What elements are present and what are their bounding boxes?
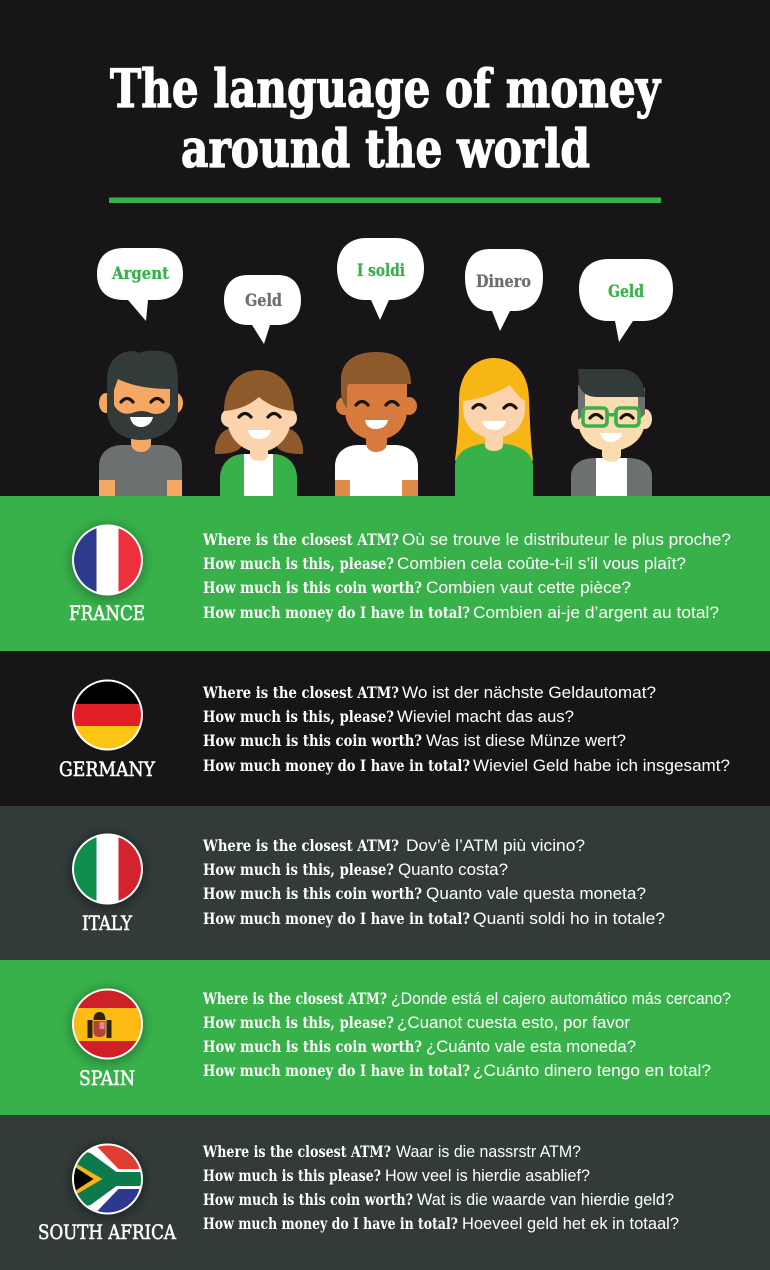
panel: South Africa: How much is this please? — [203, 1166, 381, 1185]
panel: Spain: ¿Donde está el cajero automático más cercano? — [391, 990, 731, 1008]
panel: South Africa — [0, 1115, 770, 1270]
panel: South Africa: How much is this coin worth? — [203, 1190, 413, 1209]
panel: France — [0, 496, 770, 651]
character: bearded man — [99, 351, 183, 496]
panel: Germany: How much is this coin worth? — [203, 731, 422, 750]
panel: South Africa: How much money do I have in total? — [203, 1214, 458, 1233]
panel: Germany — [60, 680, 730, 776]
speech bubble: Argent — [97, 248, 183, 321]
flag: Spain — [72, 988, 143, 1060]
panel: Italy: Quanti soldi ho in totale? — [473, 910, 665, 928]
panel: Italy — [0, 806, 770, 960]
character: girl with pigtails — [215, 370, 303, 496]
speech bubble: I soldi — [337, 238, 424, 320]
flag: Italy — [72, 834, 143, 904]
panel: France: Combien vaut cette pièce? — [426, 579, 631, 597]
panel: France: How much money do I have in total? — [203, 603, 470, 622]
panel: France: How much is this, please? — [203, 554, 394, 573]
panel: Italy: How much is this, please? — [203, 860, 394, 879]
title: The language of money — [110, 59, 661, 120]
panel: France: How much is this coin worth? — [203, 578, 422, 597]
speech bubble: Geld (green): Geld — [608, 282, 644, 301]
panel: Germany: How much is this, please? — [203, 707, 394, 726]
panel: Italy: How much is this coin worth? — [203, 884, 422, 903]
title: around the world — [181, 119, 590, 180]
character: man with brown hair — [335, 352, 418, 496]
panel: France: Combien cela coûte-t-il s’il vous plaît? — [397, 555, 686, 573]
speech bubble: I soldi: I soldi — [357, 261, 405, 280]
panel: Spain — [0, 960, 770, 1115]
flag: South Africa — [72, 1143, 143, 1215]
speech bubble: Geld (green) — [579, 259, 673, 342]
panel: Italy: Dov’è l’ATM più vicino? — [406, 837, 585, 855]
panel: South Africa: Wat is die waarde van hierdie geld? — [417, 1191, 674, 1209]
panel: South Africa: Hoeveel geld het ek in totaal? — [462, 1215, 679, 1233]
panel: Germany: Where is the closest ATM? — [202, 683, 399, 702]
panel: Spain: SPAIN — [79, 1067, 135, 1090]
panel: Germany: How much money do I have in total? — [203, 756, 470, 775]
panel: Spain: ¿Cuanot cuesta esto, por favor — [397, 1014, 631, 1032]
panel: Germany: Wo ist der nächste Geldautomat? — [402, 684, 656, 702]
character: man with green glasses — [571, 369, 652, 496]
panel: France: Où se trouve le distributeur le plus proche? — [402, 531, 731, 549]
panel: Spain: How much is this, please? — [203, 1013, 394, 1032]
panel: France: Combien ai-je d’argent au total? — [473, 604, 719, 622]
speech bubble: Dinero — [465, 249, 543, 331]
panel: Germany: Wieviel macht das aus? — [397, 708, 574, 726]
panel: Spain: How much money do I have in total? — [203, 1061, 470, 1080]
panel: Italy: How much money do I have in total? — [203, 909, 470, 928]
speech bubble: Dinero: Dinero — [476, 272, 531, 291]
panel: Spain: Where is the closest ATM? — [202, 989, 387, 1008]
panel: South Africa: Waar is die nassrstr ATM? — [396, 1143, 581, 1161]
speech bubble: Geld (grey) — [224, 275, 301, 344]
panel: South Africa: Where is the closest ATM? — [202, 1142, 391, 1161]
panel: Italy: Quanto costa? — [398, 861, 508, 879]
flag: Germany — [72, 680, 143, 750]
speech bubble: Argent: Argent — [111, 264, 169, 283]
panel: France: Where is the closest ATM? — [202, 530, 399, 549]
panel: South Africa: How veel is hierdie asablief? — [385, 1167, 590, 1185]
character: blonde woman — [455, 358, 533, 496]
title — [110, 59, 661, 180]
panel: Spain: ¿Cuánto dinero tengo en total? — [473, 1062, 711, 1080]
panel: Spain: ¿Cuánto vale esta moneda? — [426, 1038, 636, 1056]
panel: South Africa: SOUTH AFRICA — [38, 1221, 177, 1244]
panel: Italy: ITALY — [82, 912, 133, 935]
panel: Germany: Wieviel Geld habe ich insgesamt? — [473, 757, 730, 775]
panel: Spain: How much is this coin worth? — [203, 1037, 422, 1056]
panel: Germany: GERMANY — [59, 758, 156, 781]
panel: Italy: Quanto vale questa moneta? — [426, 885, 646, 903]
panel: Germany: Was ist diese Münze wert? — [426, 732, 626, 750]
speech bubble: Geld (grey): Geld — [245, 291, 282, 310]
panel: France: FRANCE — [69, 602, 145, 625]
flag: France — [72, 524, 143, 596]
panel: Italy: Where is the closest ATM? — [202, 836, 399, 855]
